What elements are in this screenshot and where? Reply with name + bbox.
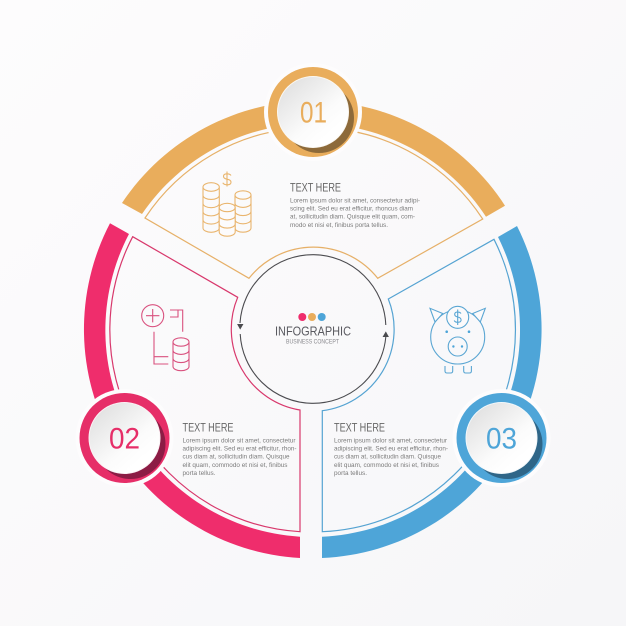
icon: coin stacks with dollar sign [203,172,251,236]
text block 01: scing elit. Sed eu erat efficitur, rhoncus diam [290,206,413,213]
text block 03: adipiscing elit. Sed eu erat efficitur, rhon- [334,446,448,453]
panel 01: orange segment [122,101,505,278]
text block 02: TEXT HERE [182,422,234,434]
number badge 03 [456,389,546,483]
text block 01 [290,182,420,229]
text block 03: Lorem ipsum dolor sit amet, consectetur [334,438,448,444]
text block 02: Lorem ipsum dolor sit amet, consectetur [182,438,296,444]
center title: INFOGRAPHIC [275,324,351,338]
orange outer band [122,101,505,217]
number badge 01 [264,63,362,161]
icon: piggy bank with coin [430,306,485,373]
blue outer band [322,226,542,558]
three coloured dots [298,313,326,321]
orange segment outline [145,127,483,278]
text block 03: cus diam at, sollicitudin diam. Quisque [334,454,441,461]
panel 03: blue segment [322,226,542,558]
text block 03: elit quam, commodo et nisi et, finibus [334,462,440,469]
panel 02: pink segment [84,223,300,558]
icon: plus circle linked to database [142,305,189,371]
text block 01: at, sollicitudin diam. Quisque elit quam, com- [290,214,415,221]
text block 03: porta tellus. [334,470,367,477]
text block 02 [182,422,296,477]
center subtitle: BUSINESS CONCEPT [286,340,339,346]
number badge 02 [80,389,170,484]
text block 03 [334,422,448,477]
text block 01: modo et nisi et, finibus porta tellus. [290,222,388,229]
text block 01: Lorem ipsum dolor sit amet, consectetur adipi- [290,198,420,204]
pink outer band [84,223,300,558]
text block 03: TEXT HERE [334,422,385,434]
center circle with arrows [238,255,388,403]
text block 01: TEXT HERE [290,182,341,194]
blue segment outline [322,239,515,532]
pink segment outline [110,237,300,532]
number badge 03: 03 [486,422,517,455]
text block 02: cus diam at, sollicitudin diam. Quisque [182,454,290,461]
number badge 02: 02 [109,422,140,455]
text block 02: adipiscing elit. Sed eu erat efficitur, rhon- [182,446,296,453]
center label [275,313,351,346]
text block 02: porta tellus. [182,470,216,477]
text block 02: elit quam, commodo et nisi et, finibus [182,462,288,469]
number badge 01: 01 [300,97,327,130]
